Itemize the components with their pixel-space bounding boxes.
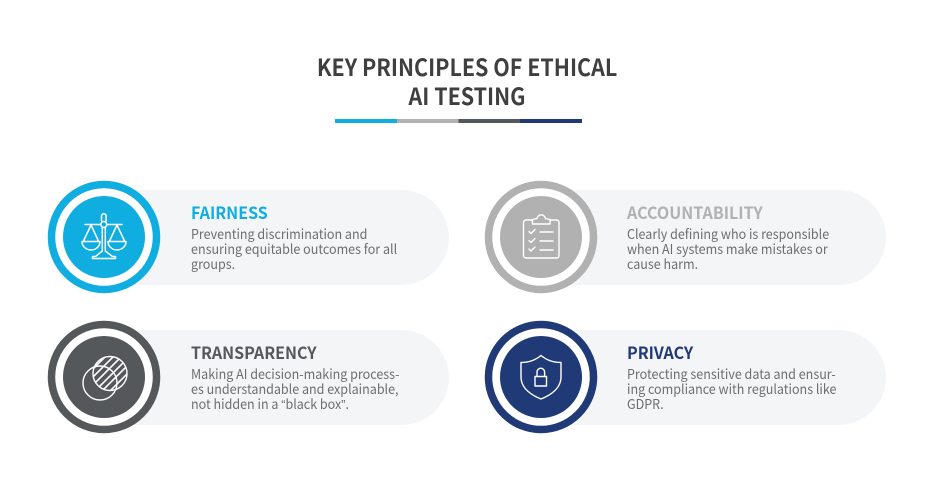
text: privacy: ing compliance with regulations like	[627, 379, 836, 398]
heading: transparency: TRANSPARENCY	[190, 340, 316, 364]
text: accountability	[627, 224, 829, 273]
panel: accountability	[484, 180, 886, 294]
text: accountability: when AI systems make mistakes or	[627, 239, 828, 258]
heading: accountability: ACCOUNTABILITY	[627, 200, 763, 224]
text: privacy: GDPR.	[627, 394, 664, 413]
pill background	[546, 190, 886, 285]
text: privacy	[627, 364, 836, 413]
icon: shield with lock	[484, 320, 598, 434]
text: fairness: Preventing discrimination and	[190, 224, 367, 243]
text: accountability: Clearly defining who is responsible	[627, 224, 829, 243]
text: transparency: es understandable and explainable,	[190, 379, 398, 398]
panel: transparency	[48, 320, 449, 434]
heading: fairness: FAIRNESS	[191, 200, 268, 224]
title	[317, 49, 617, 112]
text: fairness: groups.	[190, 254, 235, 273]
icon: balance scale	[48, 180, 160, 294]
title: AI TESTING	[409, 78, 526, 112]
panel: fairness	[48, 180, 449, 294]
text: fairness: ensuring equitable outcomes for all	[190, 239, 397, 258]
heading: privacy: PRIVACY	[627, 340, 693, 364]
text: fairness	[190, 224, 397, 273]
text: transparency: Making AI decision-making process-	[190, 364, 399, 383]
text: accountability: cause harm.	[627, 254, 698, 273]
text: privacy: Protecting sensitive data and ensur-	[627, 364, 836, 383]
title: KEY PRINCIPLES OF ETHICAL	[317, 49, 617, 83]
icon: overlapping circles	[48, 320, 160, 434]
panel: privacy	[484, 320, 886, 434]
title underline	[335, 119, 582, 123]
pill background	[546, 330, 886, 425]
icon: clipboard checklist	[484, 180, 598, 294]
text: transparency	[190, 364, 399, 413]
pill background	[109, 330, 449, 425]
pill background	[109, 190, 449, 285]
text: transparency: not hidden in a “black box”.	[190, 394, 348, 413]
